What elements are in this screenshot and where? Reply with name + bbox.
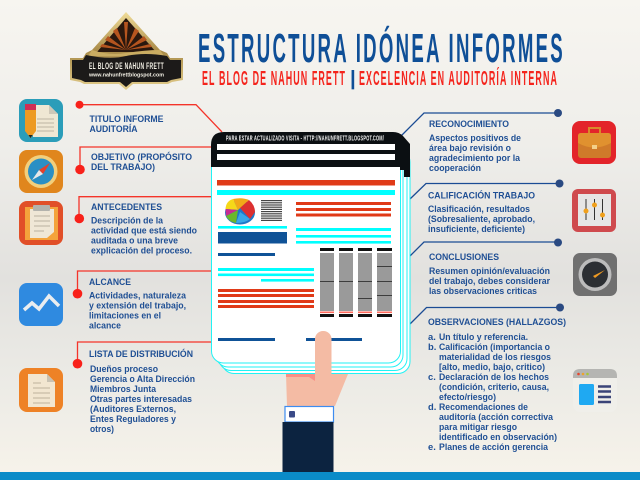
icon: compass xyxy=(19,150,63,193)
text: antecedentes: auditada o una breve xyxy=(91,235,178,246)
header rules xyxy=(217,144,395,160)
text: antecedentes: actividad que está siendo xyxy=(91,225,197,236)
text: observaciones: e. xyxy=(428,441,436,452)
text: alcance: alcance xyxy=(89,320,121,331)
text: observaciones: c. xyxy=(428,371,436,382)
connector lines: right xyxy=(400,109,564,324)
icon: document and pencil xyxy=(19,99,63,142)
shirt cuff xyxy=(285,406,334,422)
document header band xyxy=(211,132,410,177)
text: objetivo xyxy=(91,151,192,172)
text: conclusiones: Resumen opinión/evaluación xyxy=(429,265,550,276)
text: objetivo: DEL TRABAJO) xyxy=(91,161,155,172)
text: lista de distribucion: (Auditores Externos, xyxy=(90,403,176,414)
text: observaciones: para mitigar riesgo xyxy=(439,421,517,432)
jacket sleeve xyxy=(282,422,334,472)
text: alcance: limitaciones en el xyxy=(89,310,161,321)
text: lista de distribucion: Dueños proceso xyxy=(90,363,158,374)
text: reconocimiento: RECONOCIMIENTO xyxy=(429,118,509,129)
icon: window xyxy=(573,369,617,412)
text: calificacion trabajo: CALIFICACIÓN TRABAJO xyxy=(428,190,535,201)
text: lista de distribucion: Otras partes interesadas xyxy=(90,393,192,404)
text: lista de distribucion: LISTA DE DISTRIBUCIÓN xyxy=(89,348,193,359)
text: observaciones: Planes de acción gerencia xyxy=(439,441,549,452)
text: observaciones: Declaración de los hechos xyxy=(439,371,549,382)
text: antecedentes: Descripción de la xyxy=(91,215,164,226)
pie chart xyxy=(225,198,255,224)
text: antecedentes: ANTECEDENTES xyxy=(91,201,162,212)
text: observaciones: Un título y referencia. xyxy=(439,331,528,342)
subtitle: | xyxy=(350,67,358,90)
text: calificacion trabajo: (Sobresaliente, aprobado, xyxy=(428,213,535,224)
text: lista de distribucion: Entes Reguladores y xyxy=(90,413,177,424)
text: observaciones: materialidad de los riesgos xyxy=(439,351,551,362)
icon: briefcase xyxy=(572,121,616,164)
text: antecedentes xyxy=(91,201,197,256)
document stack xyxy=(211,132,410,374)
table columns xyxy=(320,248,392,317)
text: lista de distribucion: Gerencia o Alta Dirección xyxy=(90,373,195,384)
text: titulo informe: TITULO INFORME xyxy=(90,113,164,124)
cuff button xyxy=(289,411,295,418)
text: titulo informe xyxy=(90,113,164,134)
text: lista de distribucion: Miembros Junta xyxy=(90,383,157,394)
text: lista de distribucion xyxy=(89,348,195,434)
text: observaciones: efecto/riesgo) xyxy=(439,391,496,402)
text: conclusiones: las observaciones criticas xyxy=(429,285,537,296)
text: observaciones: [alto, medio, bajo, critico) xyxy=(439,361,545,372)
logo url: www.nahunfrettblogspot.com xyxy=(88,72,164,78)
text: observaciones: Calificación (importancia o xyxy=(439,341,550,352)
front sheet xyxy=(212,140,400,363)
text: alcance: ALCANCE xyxy=(89,276,131,287)
bottom bar xyxy=(0,472,640,480)
text: reconocimiento: Aspectos positivos de xyxy=(429,132,521,143)
text: alcance: y extensión del trabajo, xyxy=(89,300,186,311)
text: reconocimiento xyxy=(429,118,521,173)
text: calificacion trabajo: insuficiente, deficiente) xyxy=(428,223,525,234)
text: calificacion trabajo: Clasificación, resultados xyxy=(428,203,530,214)
text: alcance xyxy=(89,276,187,331)
logo badge xyxy=(70,12,183,90)
text: observaciones: d. xyxy=(428,401,436,412)
text: reconocimiento: agradecimiento por la xyxy=(429,152,521,163)
text: alcance: Actividades, naturaleza xyxy=(89,290,187,301)
logo name: EL BLOG DE NAHUN FRETT xyxy=(89,61,164,71)
text: reconocimiento: área bajo revisión o xyxy=(429,142,511,153)
text: observaciones: Recomendaciones de xyxy=(439,401,528,412)
text: observaciones: OBSERVACIONES (HALLAZGOS) xyxy=(428,316,566,327)
text: observaciones: auditoría (acción correctiva xyxy=(439,411,554,422)
text: observaciones xyxy=(428,316,566,452)
text: antecedentes: explicación del proceso. xyxy=(91,245,192,256)
header url text: PARA ESTAR ACTUALIZADO VISITA - HTTP://NAHUNFRETT.BLOGSPOT.COM/ xyxy=(226,136,384,142)
text: titulo informe: AUDITORÍA xyxy=(90,123,138,134)
text: observaciones: (condición, criterio, causa, xyxy=(439,381,549,392)
text: observaciones: b. xyxy=(428,341,436,352)
small text block xyxy=(261,200,282,221)
text: observaciones: identificado en observación) xyxy=(439,431,557,442)
icon: clipboard xyxy=(19,201,63,245)
icon: sliders xyxy=(572,189,616,232)
text: conclusiones: del trabajo, debes considerar xyxy=(429,275,550,286)
icon: document xyxy=(19,368,63,412)
text: conclusiones: CONCLUSIONES xyxy=(429,251,499,262)
back sheets xyxy=(216,144,410,374)
text: observaciones: a. xyxy=(428,331,436,342)
icon: gauge xyxy=(573,253,617,296)
text: conclusiones xyxy=(429,251,550,296)
connector lines: left xyxy=(73,101,222,369)
hand holding document xyxy=(282,331,348,472)
text: lista de distribucion: otros) xyxy=(90,423,114,434)
icon: line chart xyxy=(19,283,63,326)
text: objetivo: OBJETIVO (PROPÓSITO xyxy=(91,151,192,162)
text: calificacion trabajo xyxy=(428,190,535,234)
report bars xyxy=(217,180,395,308)
text: reconocimiento: cooperación xyxy=(429,162,481,173)
subtitle: EL BLOG DE NAHUN FRETT xyxy=(202,67,346,90)
